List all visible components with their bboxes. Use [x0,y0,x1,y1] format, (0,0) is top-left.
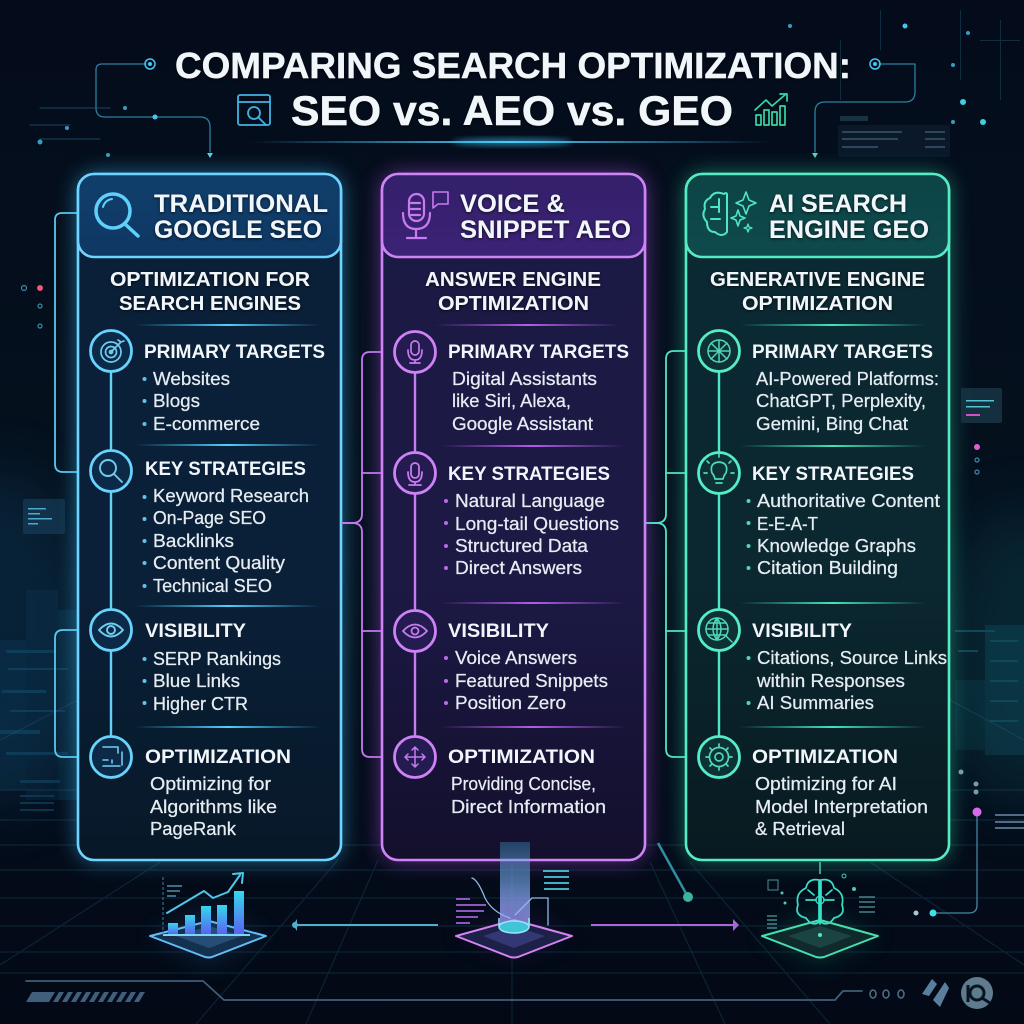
panel heading: SNIPPET AEO [460,216,631,244]
section: primary targets: PRIMARY TARGETS [448,341,629,363]
section: optimization [145,746,291,839]
section: key strategies: Long-tail Questions [455,513,619,534]
mini card left [23,499,65,534]
dividers [135,324,320,728]
section: optimization: Optimizing for [150,773,271,794]
panel heading: AI SEARCH [769,190,907,218]
section: key strategies: Authoritative Content [757,490,940,511]
arrow: AEO to SEO [292,919,438,931]
section: key strategies [142,458,309,596]
hatch bar [26,992,145,1002]
section: visibility: Voice Answers [455,647,577,668]
footer frame [26,981,904,1002]
icon: magnifier [96,194,138,236]
icon: browser search [238,95,270,125]
section: visibility: Higher CTR [153,693,248,714]
icon: tuning chart [103,747,122,766]
dividers [435,324,625,728]
section: key strategies: Technical SEO [153,575,272,596]
connectors: left of SEO panel [55,213,90,757]
section: optimization [448,746,606,817]
section: optimization: OPTIMIZATION [448,746,595,768]
panel: voice and snippet AEO [382,174,645,860]
section: visibility: VISIBILITY [752,620,852,642]
panel subheading [110,269,311,315]
icon: eye [99,624,123,636]
section: optimization [752,746,928,839]
section: optimization: PageRank [150,818,237,839]
icon: neural globe [708,340,730,362]
section: primary targets: Gemini, Bing Chat [756,413,908,434]
section: optimization: OPTIMIZATION [145,746,291,768]
panel heading: GOOGLE SEO [154,216,322,244]
section: visibility [142,620,281,714]
platform: rising bar chart [150,873,266,968]
icon: eye [403,624,427,638]
icon: target [101,340,124,362]
subtitle: SEO vs. AEO vs. GEO [291,87,733,134]
section: key strategies: Backlinks [153,530,234,551]
connectors: SEO to AEO [342,352,394,757]
section: visibility: Citations, Source Links [757,647,947,668]
panel subheading: OPTIMIZATION [742,293,893,315]
panel subheading: SEARCH ENGINES [119,293,301,315]
icon: gear [706,744,732,770]
panel heading [460,190,631,244]
section: key strategies: On-Page SEO [153,507,266,528]
section: key strategies: KEY STRATEGIES [448,463,610,485]
section: key strategies: Natural Language [455,490,605,511]
timeline [698,330,740,778]
section: visibility: Position Zero [455,692,566,713]
side dots right [974,444,980,474]
panel subheading: OPTIMIZATION [438,293,589,315]
icon: microphone [403,192,448,238]
dividers [740,324,925,728]
section: key strategies: Direct Answers [455,557,582,578]
section: primary targets: E-commerce [153,413,260,434]
panel subheading [710,269,925,315]
section: visibility [746,620,947,713]
section: key strategies: Citation Building [757,557,898,578]
platform: light beam [456,842,572,958]
section: primary targets: ChatGPT, Perplexity, [756,390,926,411]
section: key strategies: KEY STRATEGIES [145,458,306,480]
section: key strategies: Structured Data [455,535,589,556]
icon: four-way arrows [405,747,425,767]
panel heading [769,190,929,244]
section: primary targets [448,341,629,434]
section: primary targets: Digital Assistants [452,368,597,389]
section: optimization: Providing Concise, [451,773,596,794]
panel heading: TRADITIONAL [154,190,328,218]
panel heading: VOICE & [460,190,565,218]
panel heading: ENGINE GEO [769,216,929,244]
arrow: AEO to GEO [591,919,739,931]
icon: growth chart [755,94,787,125]
section: primary targets: Websites [153,368,230,389]
section: visibility: Blue Links [153,670,240,691]
panel: traditional Google SEO [78,174,341,860]
panel heading [154,190,328,244]
panel header [382,174,645,257]
panel subheading: ANSWER ENGINE [425,269,601,291]
icon: search [100,460,122,482]
panel subheading: OPTIMIZATION FOR [110,269,311,291]
panel header [686,174,949,257]
platform: AI brain [762,862,878,968]
panel subheading: GENERATIVE ENGINE [710,269,925,291]
title divider [250,138,770,146]
icon: mic with waves [408,341,422,363]
section: optimization: OPTIMIZATION [752,746,898,768]
section: visibility: VISIBILITY [448,620,549,642]
section: primary targets: like Siri, Alexa, [452,390,571,411]
section: visibility: within Responses [756,670,905,691]
side dots left [22,285,43,328]
icon: lightbulb [704,454,734,483]
diagonal probe [658,843,693,902]
timeline [90,330,132,778]
logo marks [922,977,993,1009]
panel header [78,174,341,257]
mini card right [961,388,1002,423]
section: optimization: Algorithms like [150,796,277,817]
section: primary targets: Blogs [153,390,200,411]
data table decoration [838,116,950,157]
section: optimization: & Retrieval [755,818,845,839]
section: primary targets: Google Assistant [452,413,593,434]
section: key strategies [746,463,940,578]
section: key strategies: Knowledge Graphs [757,535,916,556]
section: primary targets: AI-Powered Platforms: [756,368,939,389]
section: visibility: VISIBILITY [145,620,246,642]
section: optimization: Direct Information [451,796,606,817]
icon: globe search [706,618,732,642]
circuit top right [788,10,1020,158]
section: key strategies: Keyword Research [153,485,309,506]
section: key strategies: KEY STRATEGIES [752,463,914,485]
title [175,45,851,134]
panel subheading [425,269,601,315]
section: primary targets: PRIMARY TARGETS [144,341,325,363]
section: key strategies: Content Quality [153,552,286,573]
section: key strategies [444,463,619,578]
section: visibility [444,620,608,713]
connectors: AEO to GEO [646,351,698,757]
section: visibility: SERP Rankings [153,648,281,669]
icon: mic [408,463,422,485]
section: key strategies: E-E-A-T [757,513,818,534]
section: primary targets [752,341,939,434]
section: visibility: Featured Snippets [455,670,608,691]
section: visibility: AI Summaries [757,692,874,713]
section: primary targets [142,341,325,434]
timeline [394,332,436,778]
panel: AI search engine GEO [686,174,949,860]
section: optimization: Optimizing for AI [755,773,897,794]
title: COMPARING SEARCH OPTIMIZATION: [175,45,851,86]
circuit bottom right [914,770,1024,916]
bars [168,891,244,935]
icon: brain with sparkles [703,192,756,235]
section: optimization: Model Interpretation [755,796,928,817]
circuit top left [30,59,213,158]
section: primary targets: PRIMARY TARGETS [752,341,933,363]
